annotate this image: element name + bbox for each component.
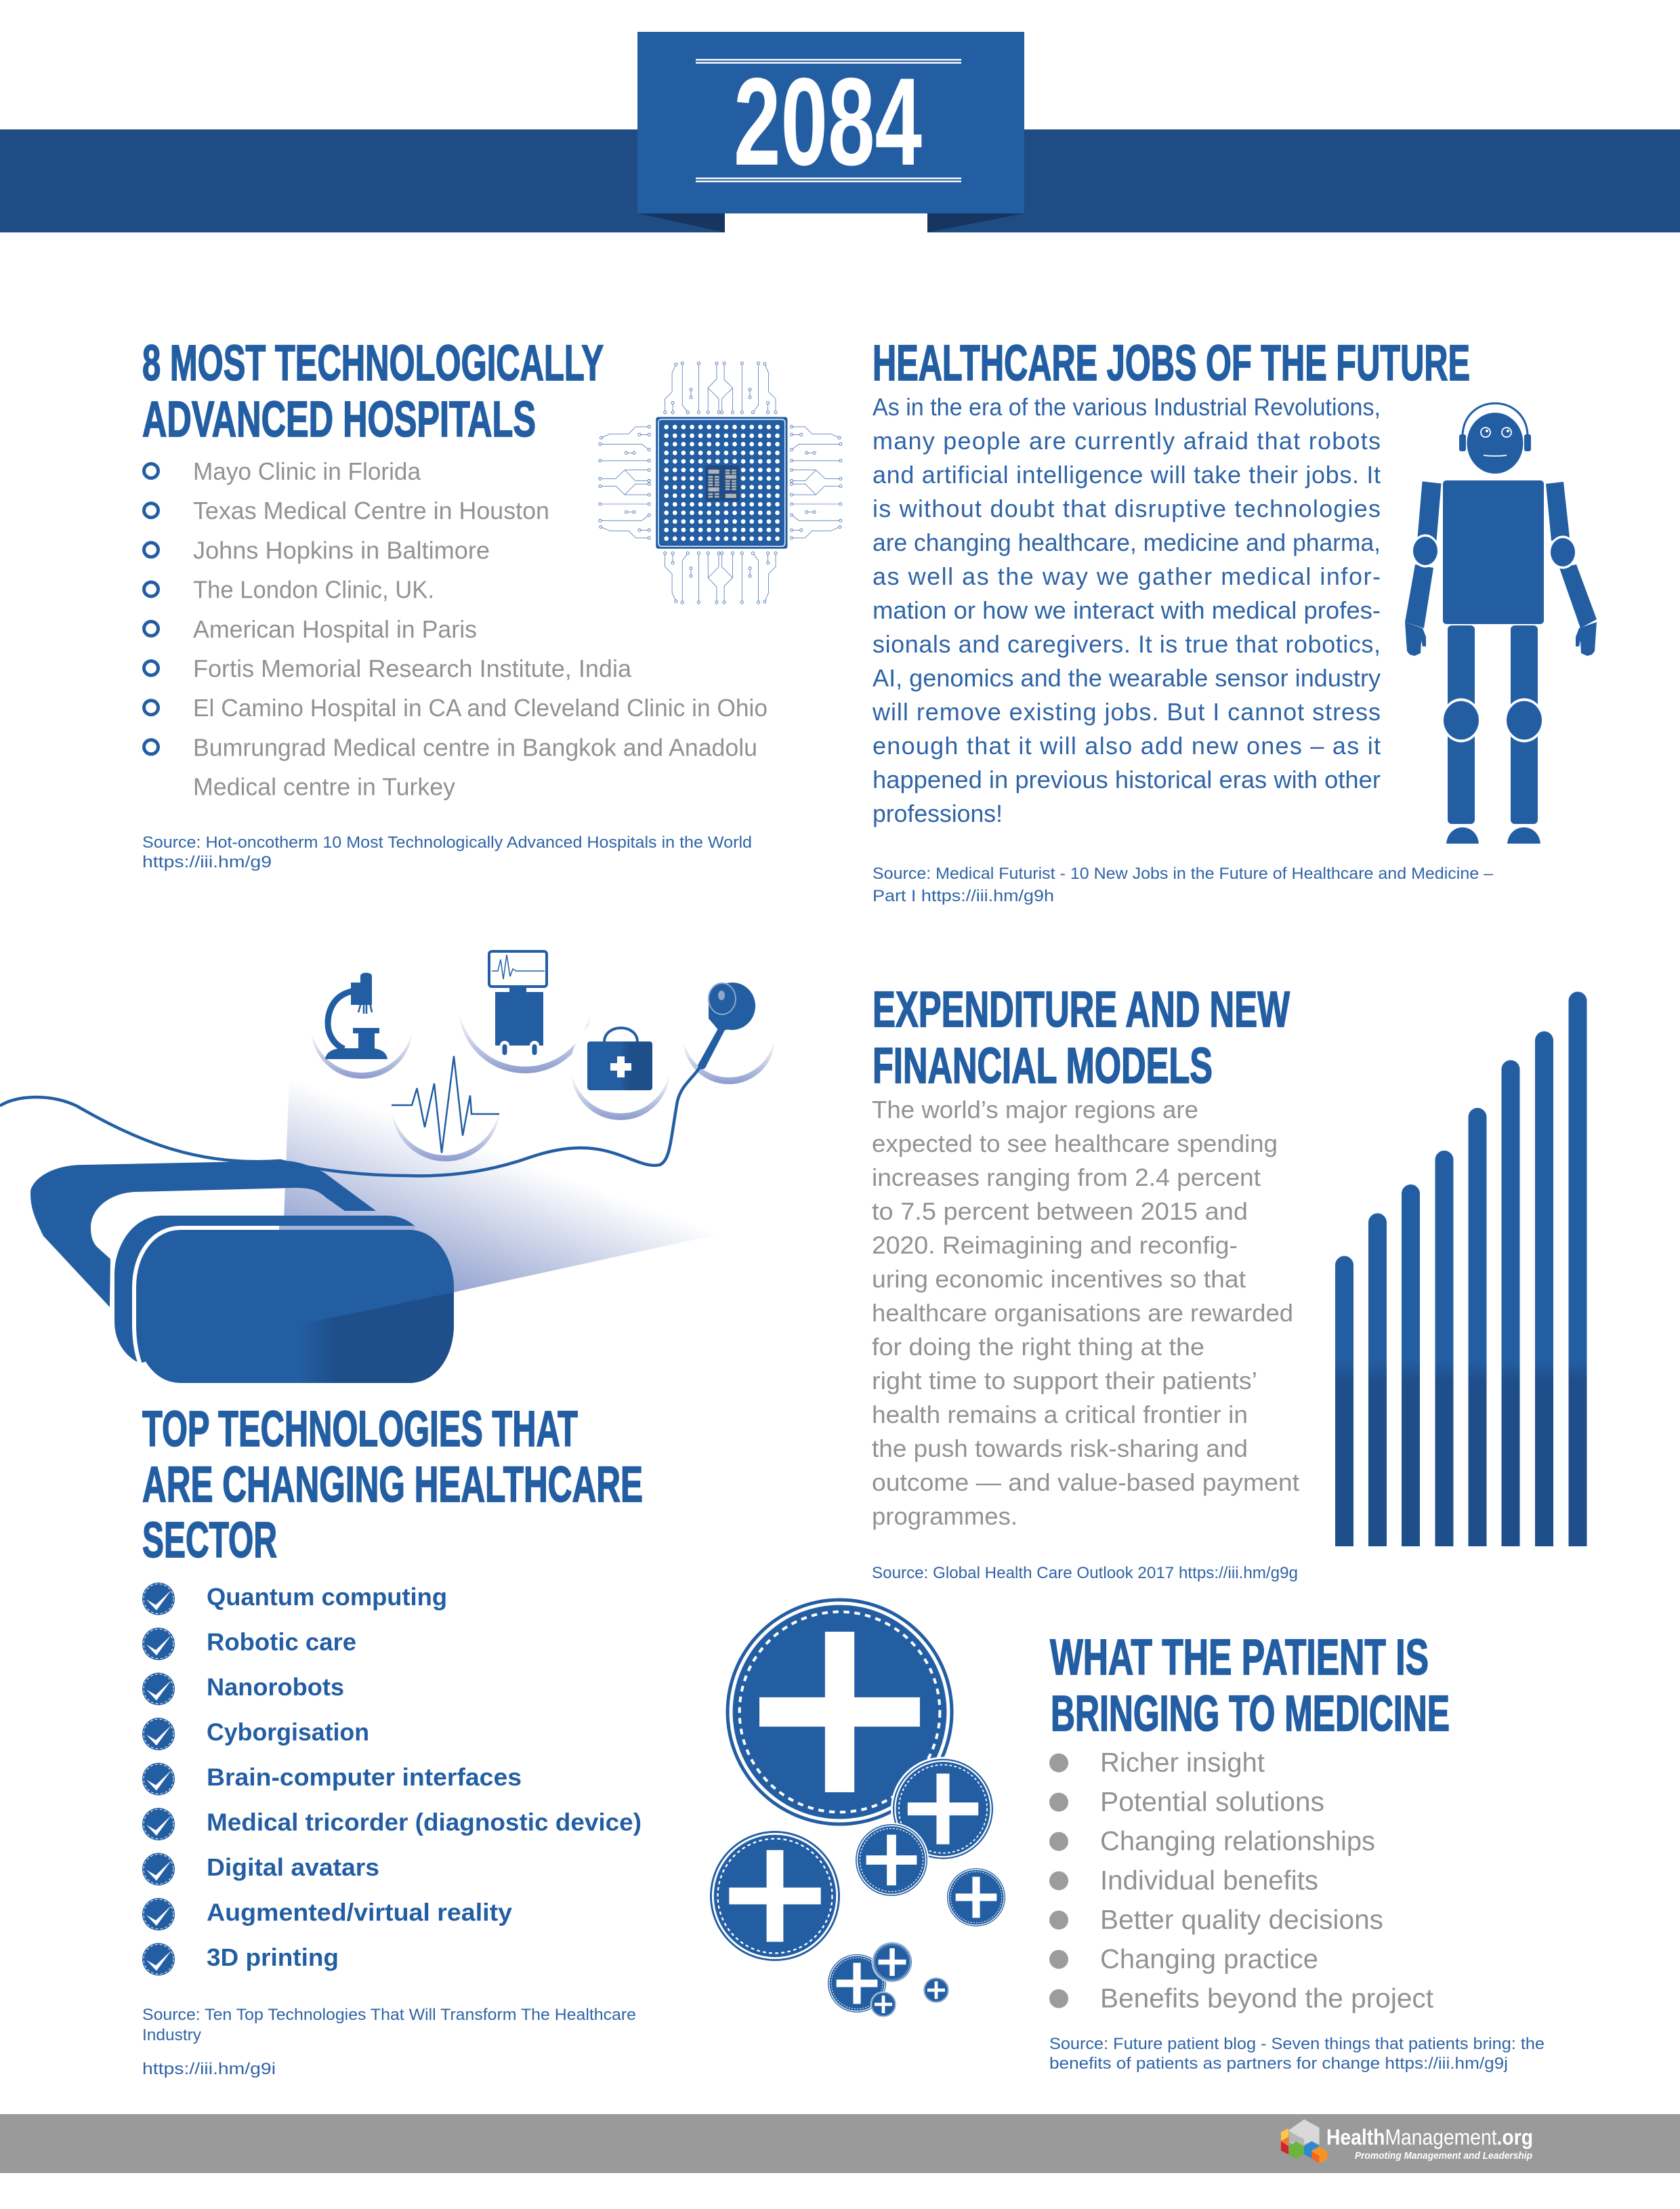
body text: jobs: is without doubt that disruptive technologies — [873, 495, 1381, 522]
patient list: Changing relationships — [1100, 1827, 1375, 1857]
body text: expenditure: increases ranging from 2.4 percent — [872, 1163, 1261, 1191]
body text: jobs: are changing healthcare, medicine and pharma, — [873, 529, 1381, 556]
technology list: Robotic care — [207, 1628, 356, 1656]
source: hospitals — [142, 833, 752, 871]
body text: expenditure: to 7.5 percent between 2015 and — [872, 1197, 1248, 1225]
panel: what the patient is bringing — [1049, 1629, 1545, 2073]
patient list: Potential solutions — [1100, 1788, 1324, 1817]
hospital list: Bumrungrad Medical centre in Bangkok and Anadolu — [193, 733, 757, 761]
body text: jobs: AI, genomics and the wearable sensor industry — [873, 664, 1381, 692]
heading: hospitals — [142, 335, 604, 447]
heading: expenditure: FINANCIAL MODELS — [873, 1037, 1213, 1094]
body text: jobs: and artificial intelligence will take their jobs. It — [873, 461, 1381, 489]
shaded corner — [298, 1292, 454, 1383]
source: jobs — [873, 865, 1494, 905]
strap — [30, 1161, 376, 1307]
technology list: Brain-computer interfaces — [207, 1763, 522, 1791]
body text: expenditure: for doing the right thing at the — [872, 1333, 1204, 1361]
icon: robot — [1405, 403, 1597, 844]
body text: expenditure: right time to support their patients’ — [872, 1367, 1257, 1395]
panel: expenditure and new financial models — [872, 981, 1587, 1582]
source: patient: benefits of patients as partners for change https://iii.hm/g9j — [1049, 2055, 1508, 2073]
bar chart — [1335, 992, 1587, 1546]
robot torso — [1443, 480, 1544, 624]
source: jobs: Part I https://iii.hm/g9h — [873, 887, 1054, 905]
source: patient: Source: Future patient blog - Seven things that patients bring: the — [1049, 2035, 1545, 2053]
technology list: Nanorobots — [207, 1673, 344, 1701]
banner: header band — [0, 32, 1680, 234]
icon: monitor on cart — [489, 951, 547, 1055]
hospital list: The London Clinic, UK. — [193, 576, 434, 604]
technology list: Cyborgisation — [207, 1718, 369, 1746]
logo: HealthManagement cubes — [1281, 2120, 1327, 2164]
source: jobs: Source: Medical Futurist - 10 New Jobs in the Future of Healthcare and Medicine – — [873, 865, 1494, 883]
icon circles — [311, 934, 775, 1161]
hospital list: El Camino Hospital in CA and Cleveland Clinic in Ohio — [193, 694, 768, 722]
body text: jobs — [872, 393, 1381, 827]
logo text: HealthManagement.org — [1326, 2125, 1533, 2149]
illustration: VR headset and medical icons — [0, 934, 775, 1383]
source: hospitals: Source: Hot-oncotherm 10 Most Technologically Advanced Hospitals in the World — [142, 833, 752, 852]
footer bar — [0, 2114, 1680, 2173]
technology list: Augmented/virtual reality — [207, 1899, 512, 1926]
source: technologies — [142, 2006, 636, 2078]
patient list: Changing practice — [1100, 1945, 1318, 1975]
heading: hospitals: ADVANCED HOSPITALS — [142, 391, 536, 447]
body text: jobs: professions! — [873, 800, 1003, 827]
icon: medical plus badges — [707, 1594, 1007, 2017]
body text: expenditure: 2020. Reimagining and reconfig- — [872, 1231, 1238, 1259]
body text: expenditure: The world’s major regions are — [872, 1096, 1198, 1123]
cable line — [0, 1065, 701, 1176]
body text: jobs: happened in previous historical eras with other — [873, 766, 1381, 793]
source: technologies: Industry — [142, 2026, 201, 2044]
hospital list: Texas Medical Centre in Houston — [193, 497, 549, 524]
source: hospitals: https://iii.hm/g9 — [142, 853, 272, 871]
body text: expenditure — [872, 1096, 1299, 1530]
hospital list: Johns Hopkins in Baltimore — [193, 536, 490, 564]
body text: jobs: sionals and caregivers. It is true that robotics, — [873, 630, 1381, 658]
body text: expenditure: the push towards risk-sharing and — [872, 1434, 1248, 1462]
body text: jobs: many people are currently afraid that robots — [873, 427, 1381, 455]
icon: medical bag — [587, 1028, 652, 1090]
front layer — [136, 1230, 454, 1383]
technology list — [207, 1583, 642, 1971]
icon: microchip — [599, 362, 842, 604]
robot legs — [1442, 625, 1544, 844]
source: technologies: https://iii.hm/g9i — [142, 2060, 276, 2078]
source: technologies: Source: Ten Top Technologies That Will Transform The Healthcare — [142, 2006, 636, 2024]
light beam — [279, 1077, 723, 1345]
body text: expenditure: outcome — and value-based payment — [872, 1468, 1299, 1496]
technology list: 3D printing — [207, 1943, 339, 1971]
heading: expenditure — [873, 981, 1290, 1094]
body text: jobs: enough that it will also add new ones – as it — [873, 732, 1381, 760]
heading: patient — [1050, 1629, 1450, 1741]
technology list: Quantum computing — [207, 1583, 447, 1611]
heading: technologies: TOP TECHNOLOGIES THAT — [142, 1401, 578, 1457]
hospital list: Fortis Memorial Research Institute, India — [193, 655, 632, 682]
front outline — [134, 1228, 413, 1366]
technology list: Medical tricorder (diagnostic device) — [207, 1808, 642, 1836]
heading: patient: WHAT THE PATIENT IS — [1050, 1629, 1429, 1685]
patient list: Better quality decisions — [1100, 1905, 1383, 1935]
logo text — [1326, 2125, 1533, 2162]
robot arms — [1405, 482, 1597, 656]
body text: expenditure: programmes. — [872, 1502, 1017, 1530]
robot head — [1459, 403, 1531, 474]
heading: technologies: SECTOR — [142, 1512, 277, 1568]
source: expenditure: Source: Global Health Care Outlook 2017 https://iii.hm/g9g — [872, 1564, 1298, 1582]
patient list: Richer insight — [1100, 1748, 1265, 1778]
body text: expenditure: expected to see healthcare spending — [872, 1130, 1278, 1157]
hospital list: Mayo Clinic in Florida — [193, 457, 421, 485]
body text: expenditure: health remains a critical frontier in — [872, 1401, 1248, 1428]
hospital list: Medical centre in Turkey — [193, 773, 455, 801]
body text: expenditure: uring economic incentives so that — [872, 1265, 1246, 1293]
body text: jobs: mation or how we interact with medical profes- — [873, 596, 1381, 624]
logo text: Promoting Management and Leadership — [1355, 2150, 1532, 2162]
body text: jobs: as well as the way we gather medical infor- — [873, 562, 1381, 590]
body text: jobs: will remove existing jobs. But I cannot stress — [872, 698, 1381, 726]
heading: hospitals: 8 MOST TECHNOLOGICALLY — [142, 335, 604, 391]
patient list: Individual benefits — [1100, 1866, 1318, 1896]
source: patient — [1049, 2035, 1545, 2073]
body text: expenditure: healthcare organisations are rewarded — [872, 1299, 1293, 1327]
heading: technologies: ARE CHANGING HEALTHCARE — [142, 1456, 643, 1512]
bullet rings — [144, 463, 159, 754]
grey bullets — [1049, 1754, 1068, 2008]
title: 2084 — [734, 51, 922, 191]
icon: ecg line — [392, 1056, 499, 1153]
panel: most advanced hospitals — [142, 335, 768, 871]
panel: top technologies — [142, 1401, 643, 2078]
patient list: Benefits beyond the project — [1100, 1984, 1433, 2014]
check icons — [142, 1583, 175, 1976]
icon: microscope — [325, 973, 387, 1059]
body text: jobs: As in the era of the various Industrial Revolutions, — [873, 393, 1381, 421]
technology list: Digital avatars — [207, 1853, 379, 1881]
heading: patient: BRINGING TO MEDICINE — [1051, 1685, 1450, 1741]
back layer — [114, 1216, 415, 1363]
icon: stethoscope head — [698, 978, 760, 1069]
beam strip — [279, 1226, 415, 1230]
panel: healthcare jobs of the future — [872, 335, 1494, 905]
patient list — [1100, 1748, 1433, 2014]
heading: expenditure: EXPENDITURE AND NEW — [873, 981, 1290, 1037]
hospital list: American Hospital in Paris — [193, 615, 477, 643]
hospital list — [193, 457, 768, 801]
heading: technologies — [142, 1401, 643, 1568]
